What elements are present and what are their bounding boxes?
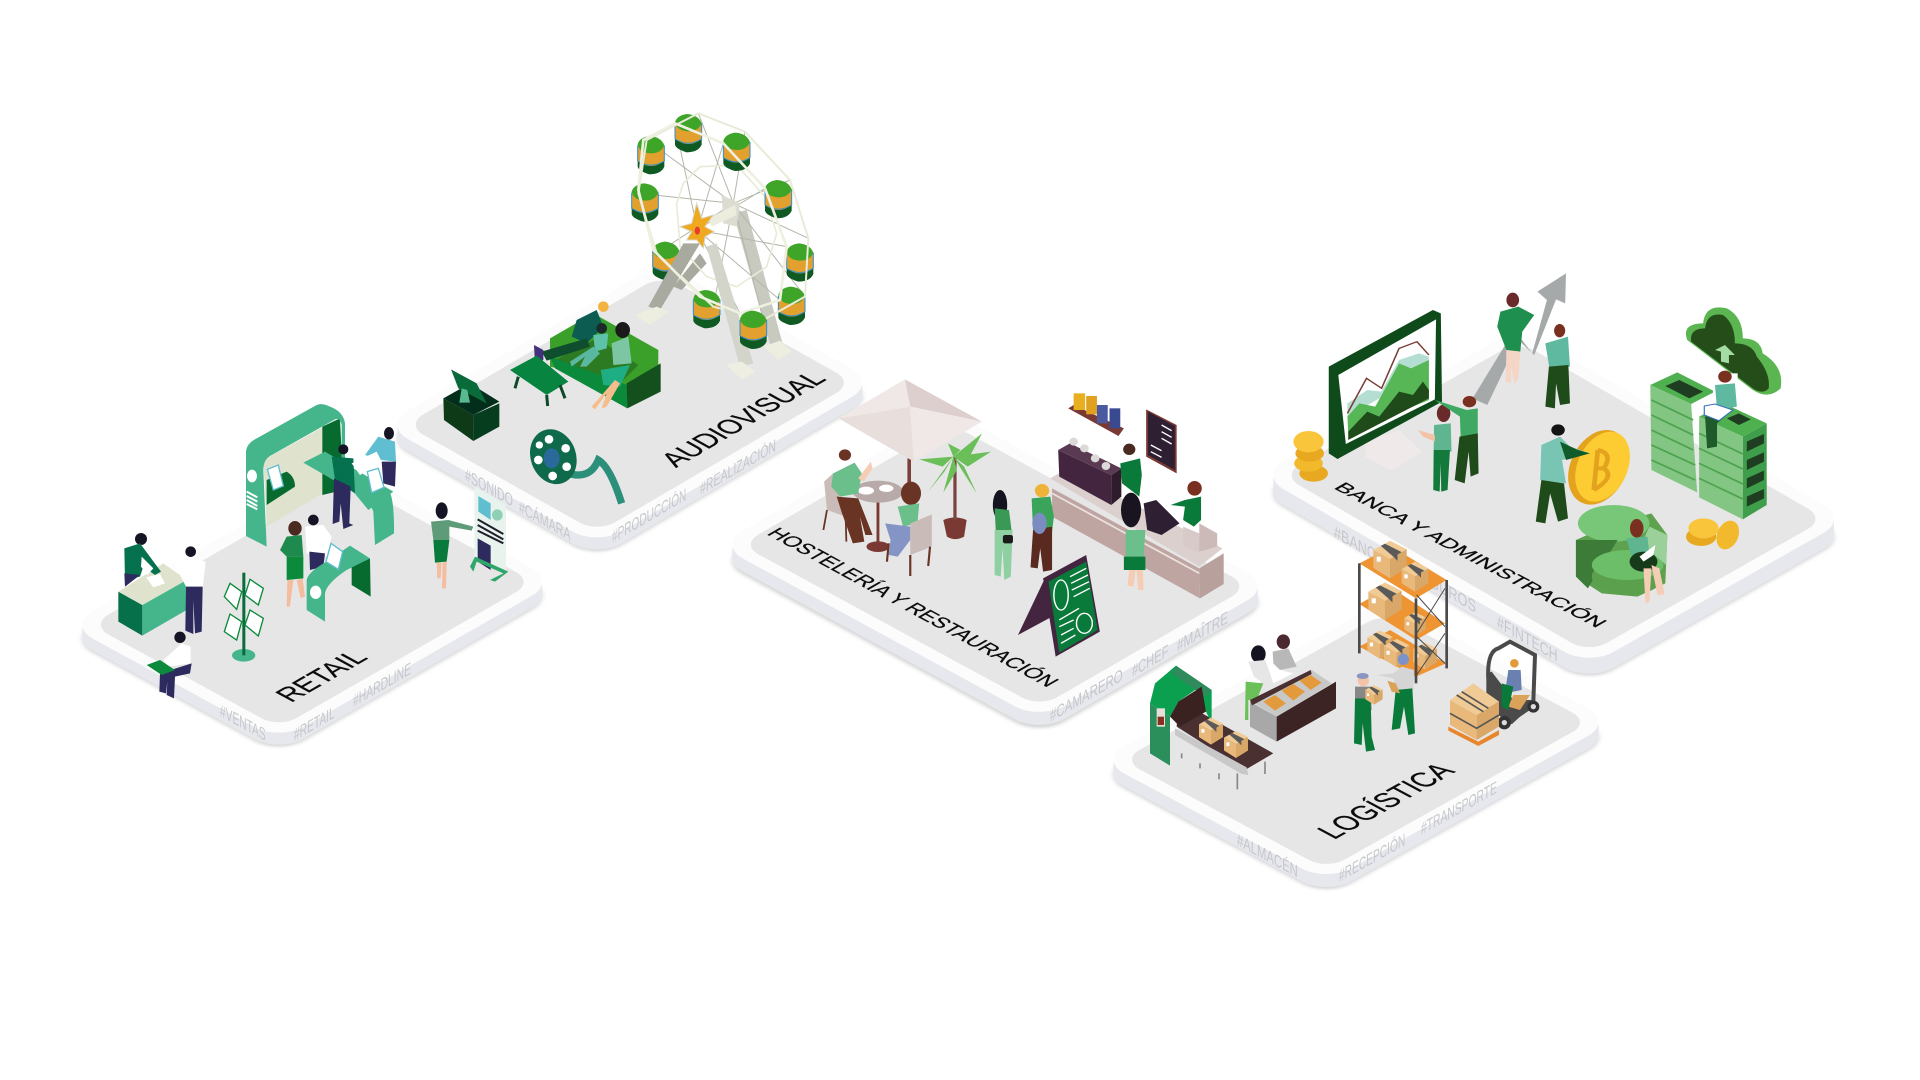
icon: cloud upload <box>1686 307 1781 395</box>
coffee machine <box>1058 438 1121 505</box>
tags: logística <box>1237 778 1497 886</box>
tags: retail: #HARDLINE <box>353 659 411 711</box>
platform: retail <box>68 466 556 755</box>
label: hostelería y restauración: HOSTELERÍA Y RESTAURACIÓN <box>762 525 1063 690</box>
standing woman <box>993 490 1013 580</box>
tags: retail: #RETAIL <box>294 703 335 745</box>
seated woman <box>885 482 932 576</box>
film reel <box>522 423 622 503</box>
platform: audiovisual <box>383 262 877 560</box>
scanner tunnel <box>1150 666 1212 766</box>
person on server <box>1704 371 1738 448</box>
tags: logística: #RECEPCIÓN <box>1339 830 1405 886</box>
tags: audiovisual: #CÁMARA <box>519 497 571 545</box>
worker with box <box>1354 673 1383 752</box>
booth arch <box>246 404 345 547</box>
tags: banca: #SEGUROS <box>1405 557 1476 617</box>
presenter <box>431 502 473 588</box>
forklift <box>1487 642 1539 729</box>
scene: logística <box>1150 541 1539 789</box>
tags: banca: #FINTECH <box>1497 612 1558 666</box>
icon: server racks <box>1650 372 1767 519</box>
brochure stand <box>224 573 263 662</box>
banner <box>470 487 508 582</box>
desk <box>118 563 187 636</box>
menu board <box>1146 409 1177 473</box>
icon: coin stack <box>1293 431 1328 482</box>
man behind desk <box>124 533 161 587</box>
icon: bitcoin coin <box>1558 424 1639 511</box>
umbrella <box>838 379 982 488</box>
man with coin <box>1536 424 1590 523</box>
wall shelf <box>1068 393 1124 436</box>
icon: monitor with chart <box>1329 310 1442 471</box>
podium <box>307 543 371 622</box>
sandwich board <box>1018 555 1100 657</box>
tags: hostelería: #CAMARERO <box>1050 665 1123 726</box>
register <box>1144 500 1180 535</box>
supervisor <box>1377 654 1415 735</box>
woman on pie chart <box>1626 519 1665 603</box>
couple <box>280 515 332 607</box>
packing table <box>1250 670 1336 742</box>
tags: retail <box>220 659 411 745</box>
people at monitor <box>1418 396 1479 492</box>
platform: logística <box>1099 600 1613 897</box>
conveyor belt <box>1175 700 1273 789</box>
tags: banca <box>1334 522 1558 666</box>
label: logística: LOGÍSTICA <box>1309 758 1463 843</box>
icon: pie chart <box>1576 505 1667 597</box>
pallet of boxes <box>1448 683 1499 746</box>
tags: banca: #BANCA <box>1334 522 1385 570</box>
tags: retail: #VENTAS <box>220 701 266 745</box>
woman at counter <box>352 427 396 487</box>
scene: audiovisual <box>443 113 813 503</box>
tags: logística: #TRANSPORTE <box>1421 778 1497 839</box>
seated woman <box>147 632 192 698</box>
label: retail: RETAIL <box>269 646 375 706</box>
man in white shirt <box>175 546 206 634</box>
tags: hostelería: #CHEF <box>1132 641 1168 681</box>
barista 2 <box>1171 481 1202 527</box>
tags: audiovisual: #SONIDO <box>465 465 513 511</box>
man standing <box>1545 324 1570 408</box>
tags: audiovisual <box>465 436 776 547</box>
seated man <box>831 449 873 543</box>
scene: banca <box>1293 273 1781 603</box>
customer at counter <box>1121 493 1145 590</box>
dining table <box>823 473 903 552</box>
platform: hostelería y restauración <box>718 411 1272 736</box>
ferris wheel <box>632 113 813 379</box>
label: banca y administración: BANCA Y ADMINISTRACIÓN <box>1329 480 1612 631</box>
booth counter <box>303 452 394 545</box>
woman holding arrow <box>1497 293 1534 384</box>
tags: audiovisual: #PRODUCCIÓN <box>612 485 686 547</box>
sofa with family <box>534 301 661 409</box>
man at counter <box>332 444 355 529</box>
palm <box>919 433 991 539</box>
tags: logística: #ALMACÉN <box>1237 830 1298 882</box>
standing man with backpack <box>1031 484 1054 572</box>
icon: coins <box>1686 518 1743 551</box>
tags: hostelería: #MAÎTRE <box>1177 607 1228 656</box>
counter <box>1050 470 1224 598</box>
packing workers <box>1245 634 1297 720</box>
platform: banca y administración <box>1259 328 1848 684</box>
scene: retail <box>118 404 508 698</box>
boxes on conveyor <box>1199 718 1248 758</box>
label: audiovisual: AUDIOVISUAL <box>654 367 833 471</box>
icon: growth arrow <box>1473 273 1566 405</box>
shelving rack <box>1359 541 1447 683</box>
scene: hostelería <box>823 379 1224 657</box>
tv cabinet <box>443 369 499 441</box>
tags: audiovisual: #REALIZACIÓN <box>700 436 776 499</box>
tags: hostelería <box>1050 607 1228 726</box>
coffee table <box>510 356 568 406</box>
barista 1 <box>1120 444 1142 497</box>
